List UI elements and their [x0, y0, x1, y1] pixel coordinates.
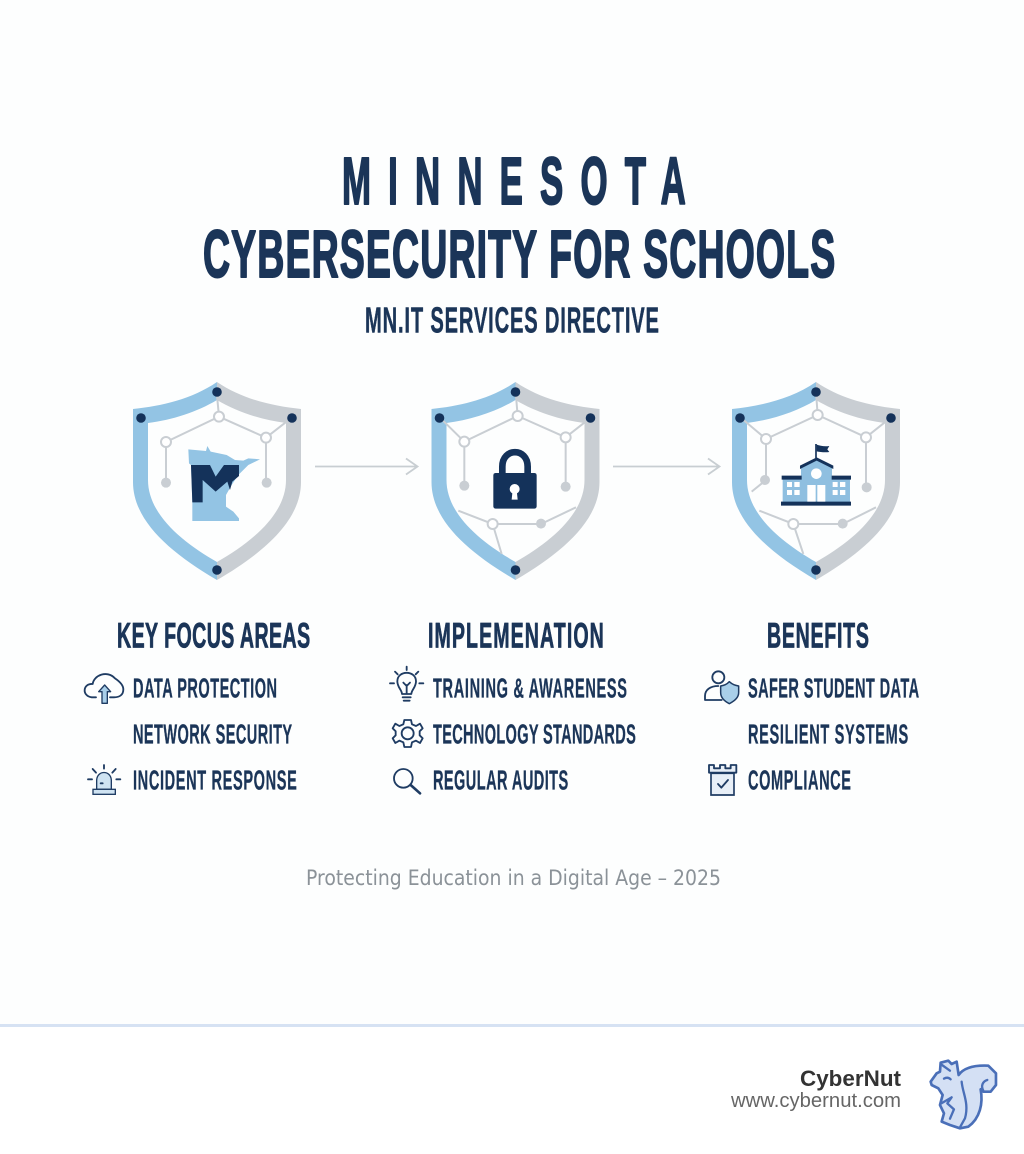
item: incident response: INCIDENT RESPONSE [133, 764, 297, 796]
item: resilient systems: RESILIENT SYSTEMS [748, 718, 908, 750]
arrow: implementation to benefits [613, 458, 720, 474]
subtitle: MN.IT SERVICES DIRECTIVE [365, 302, 659, 341]
item: data protection: DATA PROTECTION [133, 672, 277, 704]
heading: key focus areas: KEY FOCUS AREAS [117, 617, 310, 656]
item: compliance: COMPLIANCE [748, 764, 851, 796]
item: training and awareness: TRAINING & AWARENESS [433, 672, 627, 704]
icon: siren [88, 765, 120, 794]
brand name: CyberNut [800, 1066, 902, 1091]
icon: cloud upload [85, 674, 123, 703]
heading: benefits: BENEFITS [767, 617, 869, 656]
shield: school [732, 382, 900, 580]
panel: benefits [705, 617, 919, 796]
title: CYBERSECURITY FOR SCHOOLS [203, 217, 835, 292]
caption: Protecting Education in a Digital Age – 2025 [306, 866, 721, 890]
icon: squirrel logo [931, 1061, 996, 1128]
item: safer student data: SAFER STUDENT DATA [748, 672, 919, 704]
panel: key focus areas [85, 617, 310, 796]
brand url: www.cybernut.com [730, 1090, 901, 1112]
item: regular audits: REGULAR AUDITS [433, 764, 568, 796]
panel: implementation [390, 617, 636, 796]
title: MINNESOTA [342, 145, 686, 219]
icon: gear [393, 720, 423, 747]
arrow: focus areas to implementation [315, 458, 418, 474]
item: technology standards: TECHNOLOGY STANDARDS [433, 718, 636, 750]
icon: compliance checklist [709, 765, 736, 795]
title [203, 145, 835, 292]
footer band [0, 1024, 1024, 1154]
icon: magnifier [394, 769, 420, 793]
shield: padlock [432, 382, 600, 580]
icon: lightbulb [390, 667, 423, 701]
heading: implementation: IMPLEMENATION [428, 617, 604, 656]
shield: Minnesota map [133, 382, 301, 580]
item: network security: NETWORK SECURITY [133, 718, 292, 750]
icon: person with shield [705, 671, 739, 704]
